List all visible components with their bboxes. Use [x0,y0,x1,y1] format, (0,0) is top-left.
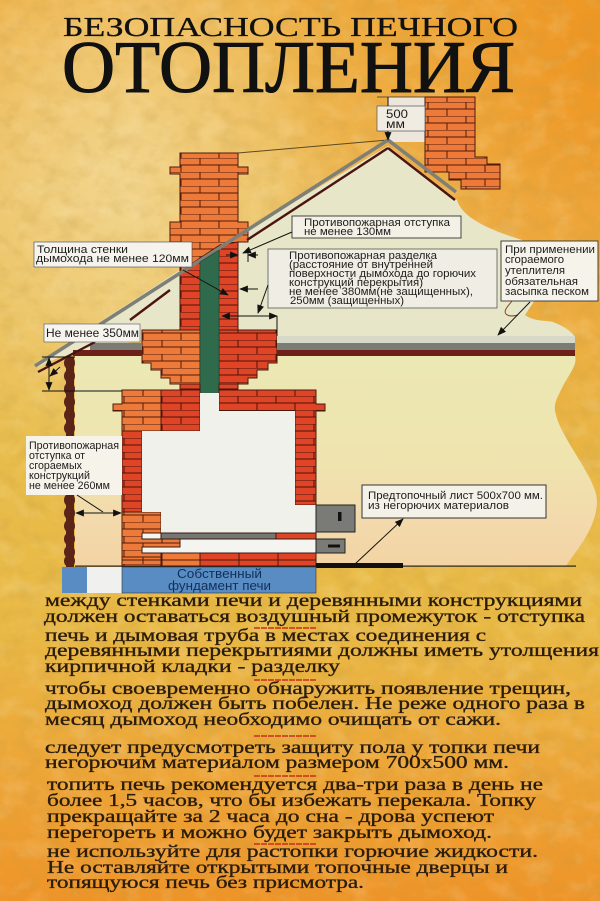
label: fire break [268,249,497,308]
label: fire break: (расстояние от внутренней [289,259,433,271]
advice text [44,590,599,892]
label: 350 mm: Не менее 350мм [46,326,139,340]
label: 260 mm setback [26,436,122,495]
label: fire break: не менее 380мм(не защищенных), [289,286,473,298]
label: 500 mm [377,97,425,140]
label: 260 mm setback: Противопожарная [29,440,119,452]
label: fire break: конструкций перекрытия) [289,277,423,289]
left inner red part [161,390,200,431]
left chimney above and below roof [170,153,248,331]
advice: flammable liquids: Не оставляйте открытыми топочные дверцы и [47,857,508,877]
advice: air gap: должен оставаться воздушный промежуток - отступка [44,606,585,626]
bottom hearth [200,553,316,567]
label: combustible insulation [501,241,598,301]
left top block [113,390,200,567]
dark green flue [200,250,219,406]
firebox white interior [142,393,316,533]
label: combustible insulation: сгораемого [505,254,564,266]
advice: flammable liquids: не используйте для растопки горючие жидкости. [47,841,538,861]
lower chimney brickwork [180,242,238,331]
advice: whitewash and soot: дымоход должен быть побелен. Не реже одного раза в [45,693,585,713]
label: 130 mm setback: не менее 130мм [304,226,391,238]
left wall red part [122,431,142,512]
label: combustible insulation: обязательная [505,276,578,288]
floor line and pre-furnace sheet [75,563,576,568]
title: БЕЗОПАСНОСТЬ ПЕЧНОГО [63,12,518,42]
house attic fill [35,146,575,368]
advice: fire break: печь и дымовая труба в местах соединения с [45,625,486,645]
label: fire break: поверхности дымохода до горючих [289,268,477,280]
advice: flammable liquids: топящуюся печь без присмотра. [47,872,364,892]
advice: whitewash and soot: чтобы своевременно обнаружить появление трещин, [45,678,571,698]
corbel: fire cut around the flue [142,330,277,391]
advice: firing schedule: более 1,5 часов, что бы избежать перекала. Топку [47,790,536,810]
label: 130 mm setback [292,216,461,238]
advice: fire break: деревянными перекрытиями должны иметь утолщения [45,640,599,660]
advice: firing schedule: топить печь рекомендуется два-три раза в день не [47,774,543,794]
clearance gap column above roof [388,97,425,142]
room fill [75,356,597,566]
label: pre-furnace sheet: Предтопочный лист 500х700 мм. [368,490,543,502]
advice: firing schedule: прекращайте за 2 часа до сна - дрова успеют [47,806,494,826]
upper chimney brickwork [170,153,248,300]
label: fire break: Противопожарная разделка [289,250,437,262]
label: combustible insulation: утеплителя [505,265,565,277]
advice: whitewash and soot: месяц дымоход необходимо очищать от сажи. [45,709,501,729]
stove doors [316,505,355,553]
label: fire break: 250мм (защищенных) [290,295,404,307]
far roof outline [238,140,388,153]
advice: firing schedule: перегореть и можно будет закрыть дымоход. [47,822,492,842]
foundation: Собственный [177,567,262,581]
insulation edge line [505,301,518,316]
advice: firing schedule [47,774,543,842]
label: 500 mm: мм [386,117,405,131]
label: chimney wall thickness: дымохода не менее 120мм [36,253,189,265]
label: 260 mm setback: конструкций [29,470,90,482]
label: chimney wall thickness: Толщина стенки [37,244,128,256]
label: combustible insulation: засыпка песком [505,286,589,298]
roof [35,140,456,372]
title: ОТОПЛЕНИЯ [62,27,515,109]
label: 260 mm setback: не менее 260мм [29,480,110,492]
advice: floor protection: следует предусмотреть защиту пола у топки печи [45,737,540,757]
right top block [219,390,325,505]
advice: fire break: кирпичной кладки - разделку [45,656,340,676]
advice: whitewash and soot [45,678,585,729]
advice: air gap [44,590,585,626]
advice: flammable liquids [47,841,538,892]
log wall [64,356,75,567]
advice: floor protection [45,737,540,772]
label: chimney wall thickness [34,242,192,267]
label: 260 mm setback: сгораемых [29,460,83,472]
right chimney [425,97,500,189]
advice: fire break [45,625,599,676]
red wavy dividers [254,628,316,844]
advice: floor protection: негорючим материалом размером 700х500 мм. [45,752,509,772]
advice: air gap: между стенками печи и деревянными конструкциями [45,590,582,610]
label: combustible insulation: При применении [505,244,595,256]
foundation [62,567,316,593]
label: 130 mm setback: Противопожарная отступка [304,217,450,229]
label: pre-furnace sheet: из негорючих материалов [368,500,509,512]
dimension arrows [42,232,530,564]
grate [142,533,316,553]
label: pre-furnace sheet [362,485,546,518]
label: 500 mm: 500 [386,107,408,121]
label: 260 mm setback: отступка от [29,450,85,462]
neck under corbel [180,384,200,391]
foundation: фундамент печи [168,579,271,593]
stove body masonry [113,384,325,567]
ceiling slab [73,336,575,356]
